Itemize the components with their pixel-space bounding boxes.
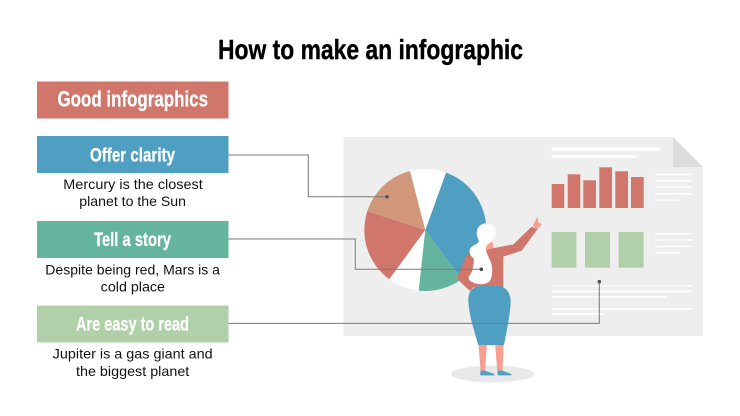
heading: good infographics: Good infographics <box>58 87 208 112</box>
panel: are easy to read: Jupiter is a gas giant and <box>53 346 213 362</box>
connector: easy to read to document <box>228 280 601 323</box>
panel: tell a story: cold place <box>101 278 165 294</box>
shoes <box>480 371 511 375</box>
panel: tell a story <box>37 221 228 294</box>
panel: offer clarity: planet to the Sun <box>79 193 186 209</box>
torso and arms <box>457 227 537 291</box>
panel: offer clarity: Offer clarity <box>90 146 175 167</box>
panel: are easy to read: the biggest planet <box>76 363 189 379</box>
bar chart <box>552 167 644 208</box>
pie chart <box>364 169 486 291</box>
green blocks <box>552 232 644 268</box>
connector: offer clarity to pie slice <box>228 155 389 199</box>
hand and neck <box>483 217 542 251</box>
text lines: document heading <box>552 147 660 158</box>
text lines: bottom paragraph <box>552 285 692 315</box>
text lines: beside bar chart <box>655 174 692 201</box>
heading: good infographics <box>37 82 228 118</box>
panel: are easy to read <box>37 306 228 379</box>
person presenting <box>451 217 542 382</box>
panel: are easy to read: Are easy to read <box>76 315 189 336</box>
panel: tell a story: Tell a story <box>94 230 171 251</box>
document illustration <box>344 137 703 336</box>
skirt <box>468 286 511 345</box>
hair <box>469 223 496 284</box>
text lines: beside green blocks <box>655 233 692 254</box>
legs <box>478 343 504 371</box>
floor shadow <box>451 366 534 382</box>
connector: tell a story to person <box>228 239 483 271</box>
panel: offer clarity: Mercury is the closest <box>63 176 203 192</box>
title: How to make an infographic <box>218 34 523 65</box>
panel: offer clarity <box>37 136 228 209</box>
panel: tell a story: Despite being red, Mars is a <box>45 261 220 277</box>
